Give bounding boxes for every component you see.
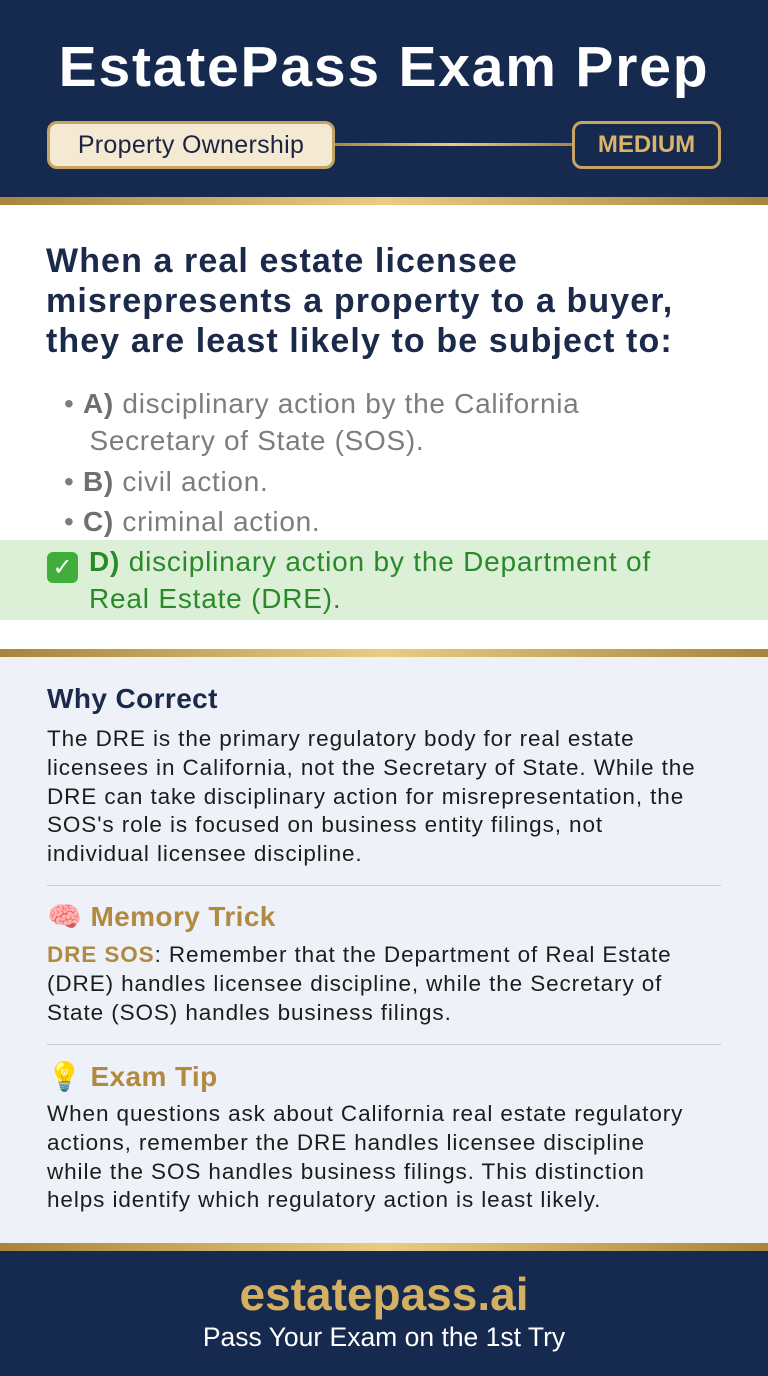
option A: Secretary of State (SOS). [89,425,424,456]
why correct text: SOS's role is focused on business entity filings, not [47,812,603,837]
exam tip text: When questions ask about California real estate regulatory [47,1101,683,1126]
exam tip text: actions, remember the DRE handles licensee discipline [47,1130,645,1155]
why correct text: individual licensee discipline. [47,841,363,866]
why correct text: licensees in California, not the Secretary of State. While the [47,755,696,780]
question [46,242,673,360]
exam tip text: helps identify which regulatory action is least likely. [47,1187,601,1212]
icon: check: ✓ [52,554,73,581]
why correct text [47,726,696,866]
option C: • C) criminal action. [64,506,320,537]
icon: check [47,552,78,583]
memory trick text: State (SOS) handles business filings. [47,1000,452,1025]
difficulty badge [572,121,721,169]
memory trick heading: 🧠 Memory Trick [47,901,276,932]
correct answer D: Real Estate (DRE). [89,583,341,614]
correct answer D [0,540,768,620]
connector line [330,143,575,146]
option A [64,388,579,456]
exam tip heading: 💡 Exam Tip [47,1061,218,1092]
memory trick text [47,942,672,1025]
header [0,0,768,198]
category pill: Property Ownership [78,131,304,159]
footer [0,1251,768,1376]
why correct heading: Why Correct [47,683,218,714]
exam tip text: while the SOS handles business filings. This distinction [47,1159,645,1184]
difficulty badge: MEDIUM [598,131,695,158]
option B: • B) civil action. [64,466,268,497]
why correct text: DRE can take disciplinary action for misrepresentation, the [47,784,684,809]
correct answer D: D) disciplinary action by the Department of [89,546,651,577]
why correct text: The DRE is the primary regulatory body for real estate [47,726,635,751]
question: misrepresents a property to a buyer, [46,282,673,320]
question: When a real estate licensee [46,242,518,280]
question: they are least likely to be subject to: [46,322,673,360]
tagline: Pass Your Exam on the 1st Try [203,1322,565,1352]
options [0,388,768,620]
option A: • A) disciplinary action by the California [64,388,579,419]
explanation panel [0,657,768,1244]
category pill [47,121,335,169]
brand: estatepass.ai [240,1268,528,1320]
memory trick text: (DRE) handles licensee discipline, while the Secretary of [47,971,662,996]
memory trick text: DRE SOS: Remember that the Department of Real Estate [47,942,672,967]
title: EstatePass Exam Prep [59,35,709,99]
exam tip text [47,1101,683,1212]
